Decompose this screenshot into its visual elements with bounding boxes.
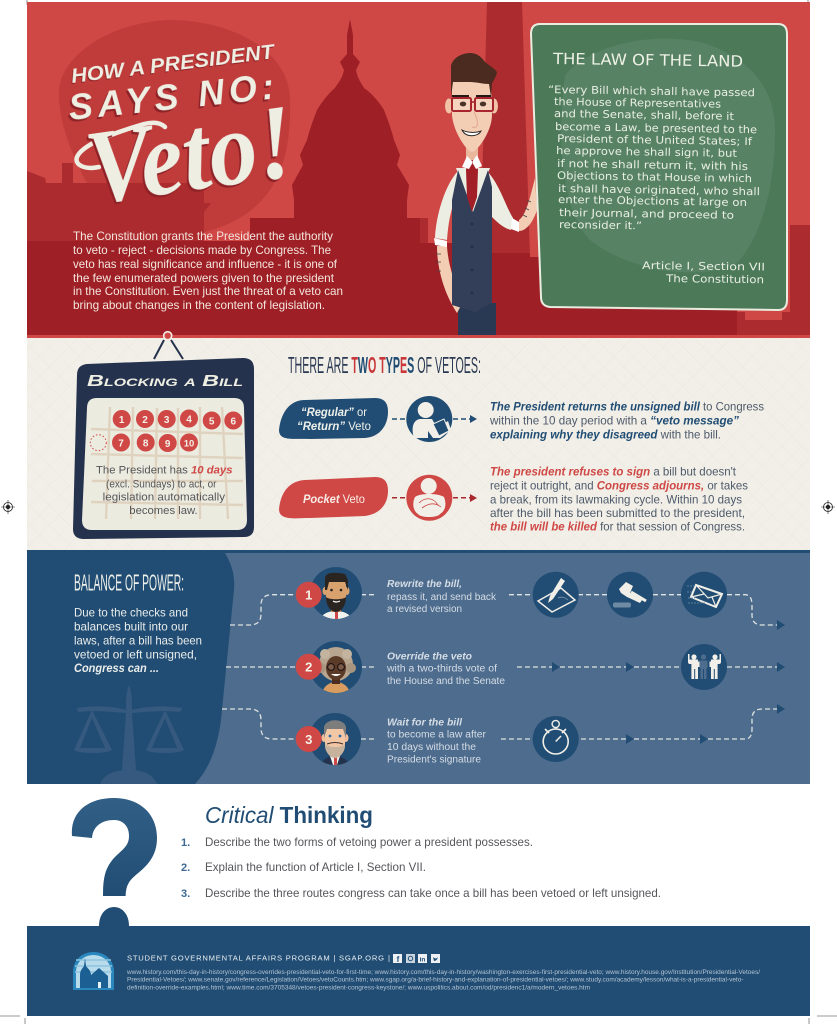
step text 3 xyxy=(387,718,487,766)
step text 2: Override the veto xyxy=(387,652,472,662)
title: veto: Veto! xyxy=(79,82,301,227)
step text 1: a revised version xyxy=(387,604,462,615)
badge 3: 3 xyxy=(305,732,312,747)
paragraph: laws, after a bill has been xyxy=(74,633,202,647)
step text 3: President's signature xyxy=(387,755,481,766)
calendar days: 6 xyxy=(231,416,237,428)
avatar: woman with glasses xyxy=(310,641,362,694)
calendar caption: The President has 10 days xyxy=(96,464,233,476)
calendar days xyxy=(90,410,242,452)
icon: people raising hands xyxy=(681,644,727,690)
board quote xyxy=(548,84,760,232)
paragraph: balances built into our xyxy=(74,619,188,633)
calendar caption xyxy=(96,464,233,517)
calendar days: 2 xyxy=(142,415,148,426)
skyline silhouette xyxy=(27,2,810,335)
hero bottom stripe xyxy=(27,335,810,338)
cream background xyxy=(27,338,810,550)
pill: regular: “Return” Veto xyxy=(297,419,371,433)
intro paragraph xyxy=(73,229,343,312)
icon: scales xyxy=(74,685,184,784)
badge 2 xyxy=(296,654,322,680)
description: regular: The President returns the unsigned bill to Congress xyxy=(490,401,764,414)
connector arrow xyxy=(392,415,477,423)
step text 2: the House and the Senate xyxy=(387,676,505,687)
step text 2 xyxy=(386,652,505,687)
intro paragraph: to veto - reject - decisions made by Congress. The xyxy=(73,243,331,257)
description: pocket: The president refuses to sign a bill but doesn't xyxy=(490,465,737,478)
intro paragraph: in the Constitution. Even just the threat of a veto can xyxy=(73,284,343,298)
social icons: in xyxy=(420,956,425,964)
avatar: bearded man xyxy=(310,567,362,620)
board citation xyxy=(642,260,765,286)
board heading: THE LAW OF THE LAND xyxy=(552,50,743,71)
board quote: it shall have originated, who shall xyxy=(558,183,760,198)
heading: two types: THERE ARE TWO TYPES OF VETOES: xyxy=(288,352,481,378)
title: says no: SAYS NO: xyxy=(67,66,276,128)
board quote: become a Law, be presented to the xyxy=(555,121,757,136)
board glow xyxy=(561,39,775,272)
heading: critical thinking: Critical Thinking xyxy=(205,802,373,828)
question 2: 2. xyxy=(181,862,190,874)
board quote: “Every Bill which shall have passed xyxy=(548,84,755,99)
panel: chalkboard xyxy=(531,24,787,310)
description: regular: explaining why they disagreed with the bill. xyxy=(490,428,721,441)
paragraph xyxy=(74,606,202,675)
description: pocket: after the bill has been submitted to the president, xyxy=(490,507,745,520)
calendar days: 5 xyxy=(209,416,215,428)
intro paragraph: The Constitution grants the President the authority xyxy=(73,229,333,243)
title: how a president: HOW A PRESIDENT xyxy=(70,41,277,88)
references: www.history.com/this-day-in-history/congress-overrides-presidential-veto-for-first-time; www.history.com/this-day-in-history/washington-exercises-first-presidential-veto; www.history.house.gov/Institution/Presidential-Vetoes/ xyxy=(126,970,760,976)
step text 2: with a two-thirds vote of xyxy=(386,664,497,675)
icon: question mark xyxy=(72,798,157,926)
social icons xyxy=(393,954,440,964)
description: pocket xyxy=(490,465,748,534)
row: regular veto xyxy=(279,396,764,442)
badge 1: 1 xyxy=(305,588,312,602)
panel: vetoes xyxy=(27,332,810,550)
calendar days: 8 xyxy=(143,438,149,450)
intro paragraph: bring about changes in the content of legislation. xyxy=(73,298,325,312)
board citation: Article I, Section VII xyxy=(642,260,765,274)
icon: gavel xyxy=(607,572,653,618)
description: regular xyxy=(489,401,764,441)
avatar: older man xyxy=(309,713,361,765)
board quote: enter the Objections at large on xyxy=(558,194,747,209)
calendar heading: Blocking a Bill xyxy=(87,373,243,390)
description: pocket: a break, from its lawmaking cycle. Within 10 days xyxy=(490,493,742,506)
board quote: if not he shall return it, with his xyxy=(557,158,748,173)
step text 1: repass it, and send back xyxy=(387,592,497,603)
board quote: their Journal, and proceed to xyxy=(559,207,734,222)
calendar caption: legislation automatically xyxy=(103,492,225,504)
calendar caption: (excl. Sundays) to act, or xyxy=(106,479,217,491)
references xyxy=(126,970,760,991)
board quote: he approve he shall sign it, but xyxy=(556,145,737,160)
calendar days: 4 xyxy=(186,414,192,426)
social icons: f xyxy=(397,955,400,964)
pill: regular: “Regular” or xyxy=(301,405,367,419)
intro paragraph: the few enumerated powers given to the president xyxy=(73,271,335,285)
paragraph: Congress can ... xyxy=(74,661,159,675)
description: pocket: the bill will be killed for that session of Congress. xyxy=(490,521,745,534)
step text 1 xyxy=(387,579,497,615)
organisation line: STUDENT GOVERNMENTAL AFFAIRS PROGRAM | SGAP.ORG xyxy=(127,954,384,963)
question 2: Explain the function of Article I, Section VII. xyxy=(205,861,426,874)
board frame xyxy=(531,24,787,310)
icon: stopwatch xyxy=(533,716,579,762)
calendar caption: becomes law. xyxy=(129,505,198,517)
step 2 xyxy=(296,641,727,694)
step text 1: Rewrite the bill, xyxy=(387,579,462,590)
calendar days: 1 xyxy=(119,415,125,426)
intro paragraph: veto has real significance and influence - it is one of xyxy=(73,257,338,271)
paragraph: vetoed or left unsigned, xyxy=(74,647,197,661)
panel: critical thinking xyxy=(72,798,661,926)
logo xyxy=(73,952,114,990)
divider bar: | xyxy=(388,954,390,963)
calendar days: 7 xyxy=(118,438,124,450)
title: veto swash xyxy=(77,123,165,168)
calendar days: 3 xyxy=(164,415,170,426)
badge 3 xyxy=(296,726,322,752)
section background xyxy=(27,550,810,784)
pill: regular xyxy=(279,398,388,439)
icon: person reading xyxy=(406,396,452,442)
board quote: the House of Representatives xyxy=(554,96,721,111)
panel: footer xyxy=(27,926,810,1016)
connector arrow xyxy=(392,494,477,502)
question 1: Describe the two forms of vetoing power a president possesses. xyxy=(205,836,533,849)
panel: hero xyxy=(27,2,810,335)
step text 3: 10 days without the xyxy=(387,742,476,753)
left panel shape xyxy=(27,553,234,784)
calendar grid xyxy=(91,407,243,519)
calendar body xyxy=(73,358,254,539)
footer background xyxy=(27,926,810,1016)
question 3: Describe the three routes congress can take once a bill has been vetoed or left unsigned. xyxy=(205,887,661,900)
question 3: 3. xyxy=(181,888,190,900)
calendar xyxy=(73,332,254,539)
board quote: and the Senate, shall, before it xyxy=(554,108,734,123)
icon: pen signing xyxy=(533,572,579,618)
badge 2: 2 xyxy=(305,660,312,674)
step text 3: to become a law after xyxy=(387,730,487,741)
paragraph: Due to the checks and xyxy=(74,606,188,620)
panel: balance of power xyxy=(27,550,810,784)
pill: pocket xyxy=(279,477,388,518)
step 3 xyxy=(296,713,579,766)
board quote: reconsider it.” xyxy=(559,219,642,232)
calendar days: 10 xyxy=(184,438,194,450)
illustration: presenter xyxy=(434,53,537,335)
panel: balance of power: BALANCE OF POWER: xyxy=(74,570,184,596)
pill: pocket: Pocket Veto xyxy=(303,492,365,506)
question 1: 1. xyxy=(181,837,190,849)
step text 3: Wait for the bill xyxy=(387,718,462,729)
calendar hanger xyxy=(154,332,183,359)
step 1 xyxy=(296,567,727,620)
board quote: President of the United States; If xyxy=(557,133,752,148)
calendar sheet xyxy=(82,398,247,530)
board quote: Objections to that House in which xyxy=(557,170,752,185)
hero background xyxy=(27,2,810,335)
title blob xyxy=(59,20,290,233)
description: pocket: reject it outright, and Congress adjourns, or takes xyxy=(490,479,748,492)
calendar days: 9 xyxy=(165,439,171,450)
description: regular: within the 10 day period with a “veto message” xyxy=(489,415,739,428)
references: definition-override-examples.html; www.time.com/3705348/vetoes-president-congress-keystone/; www.uspolitics.about.com/od/presidenc1/a/modern_vetoes.htm xyxy=(127,985,590,991)
dashed flow lines xyxy=(222,595,785,744)
board citation: The Constitution xyxy=(665,273,764,286)
references: Presidential-Vetoes/; www.senate.gov/reference/Legislation/Vetoes/vetoCounts.htm; www.sgap.org/a-brief-history-and-explanation-of-presidential-vetoes/; www.study.com/academy/lesson/what-is-a-presidential-veto- xyxy=(127,978,744,984)
badge 1 xyxy=(296,582,322,608)
row: pocket veto xyxy=(279,465,748,534)
icon: arms crossed xyxy=(406,475,452,521)
icon: envelope xyxy=(681,572,727,618)
